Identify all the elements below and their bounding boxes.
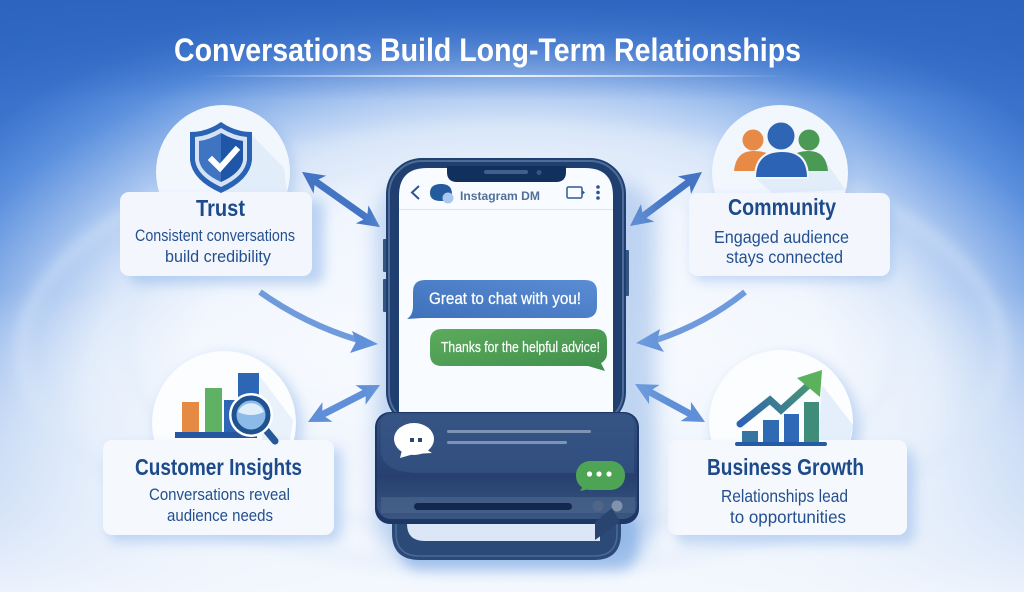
icon: green chat bubble xyxy=(576,461,625,491)
arrow: community to phone xyxy=(641,180,691,218)
arrow: community curve to phone xyxy=(636,292,745,352)
phone side buttons xyxy=(383,239,629,312)
panel: trust xyxy=(120,105,324,284)
icon: shield xyxy=(190,122,252,193)
panel: trust: Consistent conversations xyxy=(135,226,295,245)
panel: business growth xyxy=(668,350,915,544)
panel: business growth: Relationships lead xyxy=(721,486,848,506)
lower phone frame xyxy=(392,510,638,570)
arrow: trust curve to phone xyxy=(260,292,378,353)
panel: business growth: Business Growth xyxy=(707,454,864,480)
panel: customer insights: audience needs xyxy=(167,506,273,525)
panel: trust: build credibility xyxy=(165,247,271,266)
panel: trust: Trust xyxy=(196,195,245,221)
chat bubble: blue xyxy=(407,280,597,319)
icon: white chat bubble xyxy=(394,423,434,458)
panel: community: stays connected xyxy=(726,247,843,267)
arrow: trust to phone xyxy=(313,180,369,219)
arrow: customer insights to phone xyxy=(320,391,368,416)
chat bubble: green xyxy=(430,329,607,371)
chat bubble: blue: Great to chat with you! xyxy=(429,290,581,308)
phone header: Instagram DM xyxy=(460,189,540,203)
panel: customer insights xyxy=(103,351,342,542)
panel: community xyxy=(689,105,893,281)
chat bubble: green: Thanks for the helpful advice! xyxy=(441,339,600,356)
arrow: business growth to phone xyxy=(647,391,693,415)
icon: growth chart xyxy=(735,370,827,446)
panel: community: Engaged audience xyxy=(714,227,849,247)
icon: people xyxy=(734,122,828,178)
dark message tray xyxy=(375,412,639,540)
panel: customer insights: Conversations reveal xyxy=(149,485,290,504)
phone xyxy=(375,158,656,570)
phone header xyxy=(399,184,613,210)
phone notch xyxy=(447,166,566,182)
icon: bar chart with magnifier xyxy=(175,373,275,441)
title: Conversations Build Long-Term Relationships xyxy=(174,32,801,68)
panel: customer insights: Customer Insights xyxy=(135,454,302,480)
panel: business growth: to opportunities xyxy=(730,507,846,527)
panel: community: Community xyxy=(728,194,836,220)
